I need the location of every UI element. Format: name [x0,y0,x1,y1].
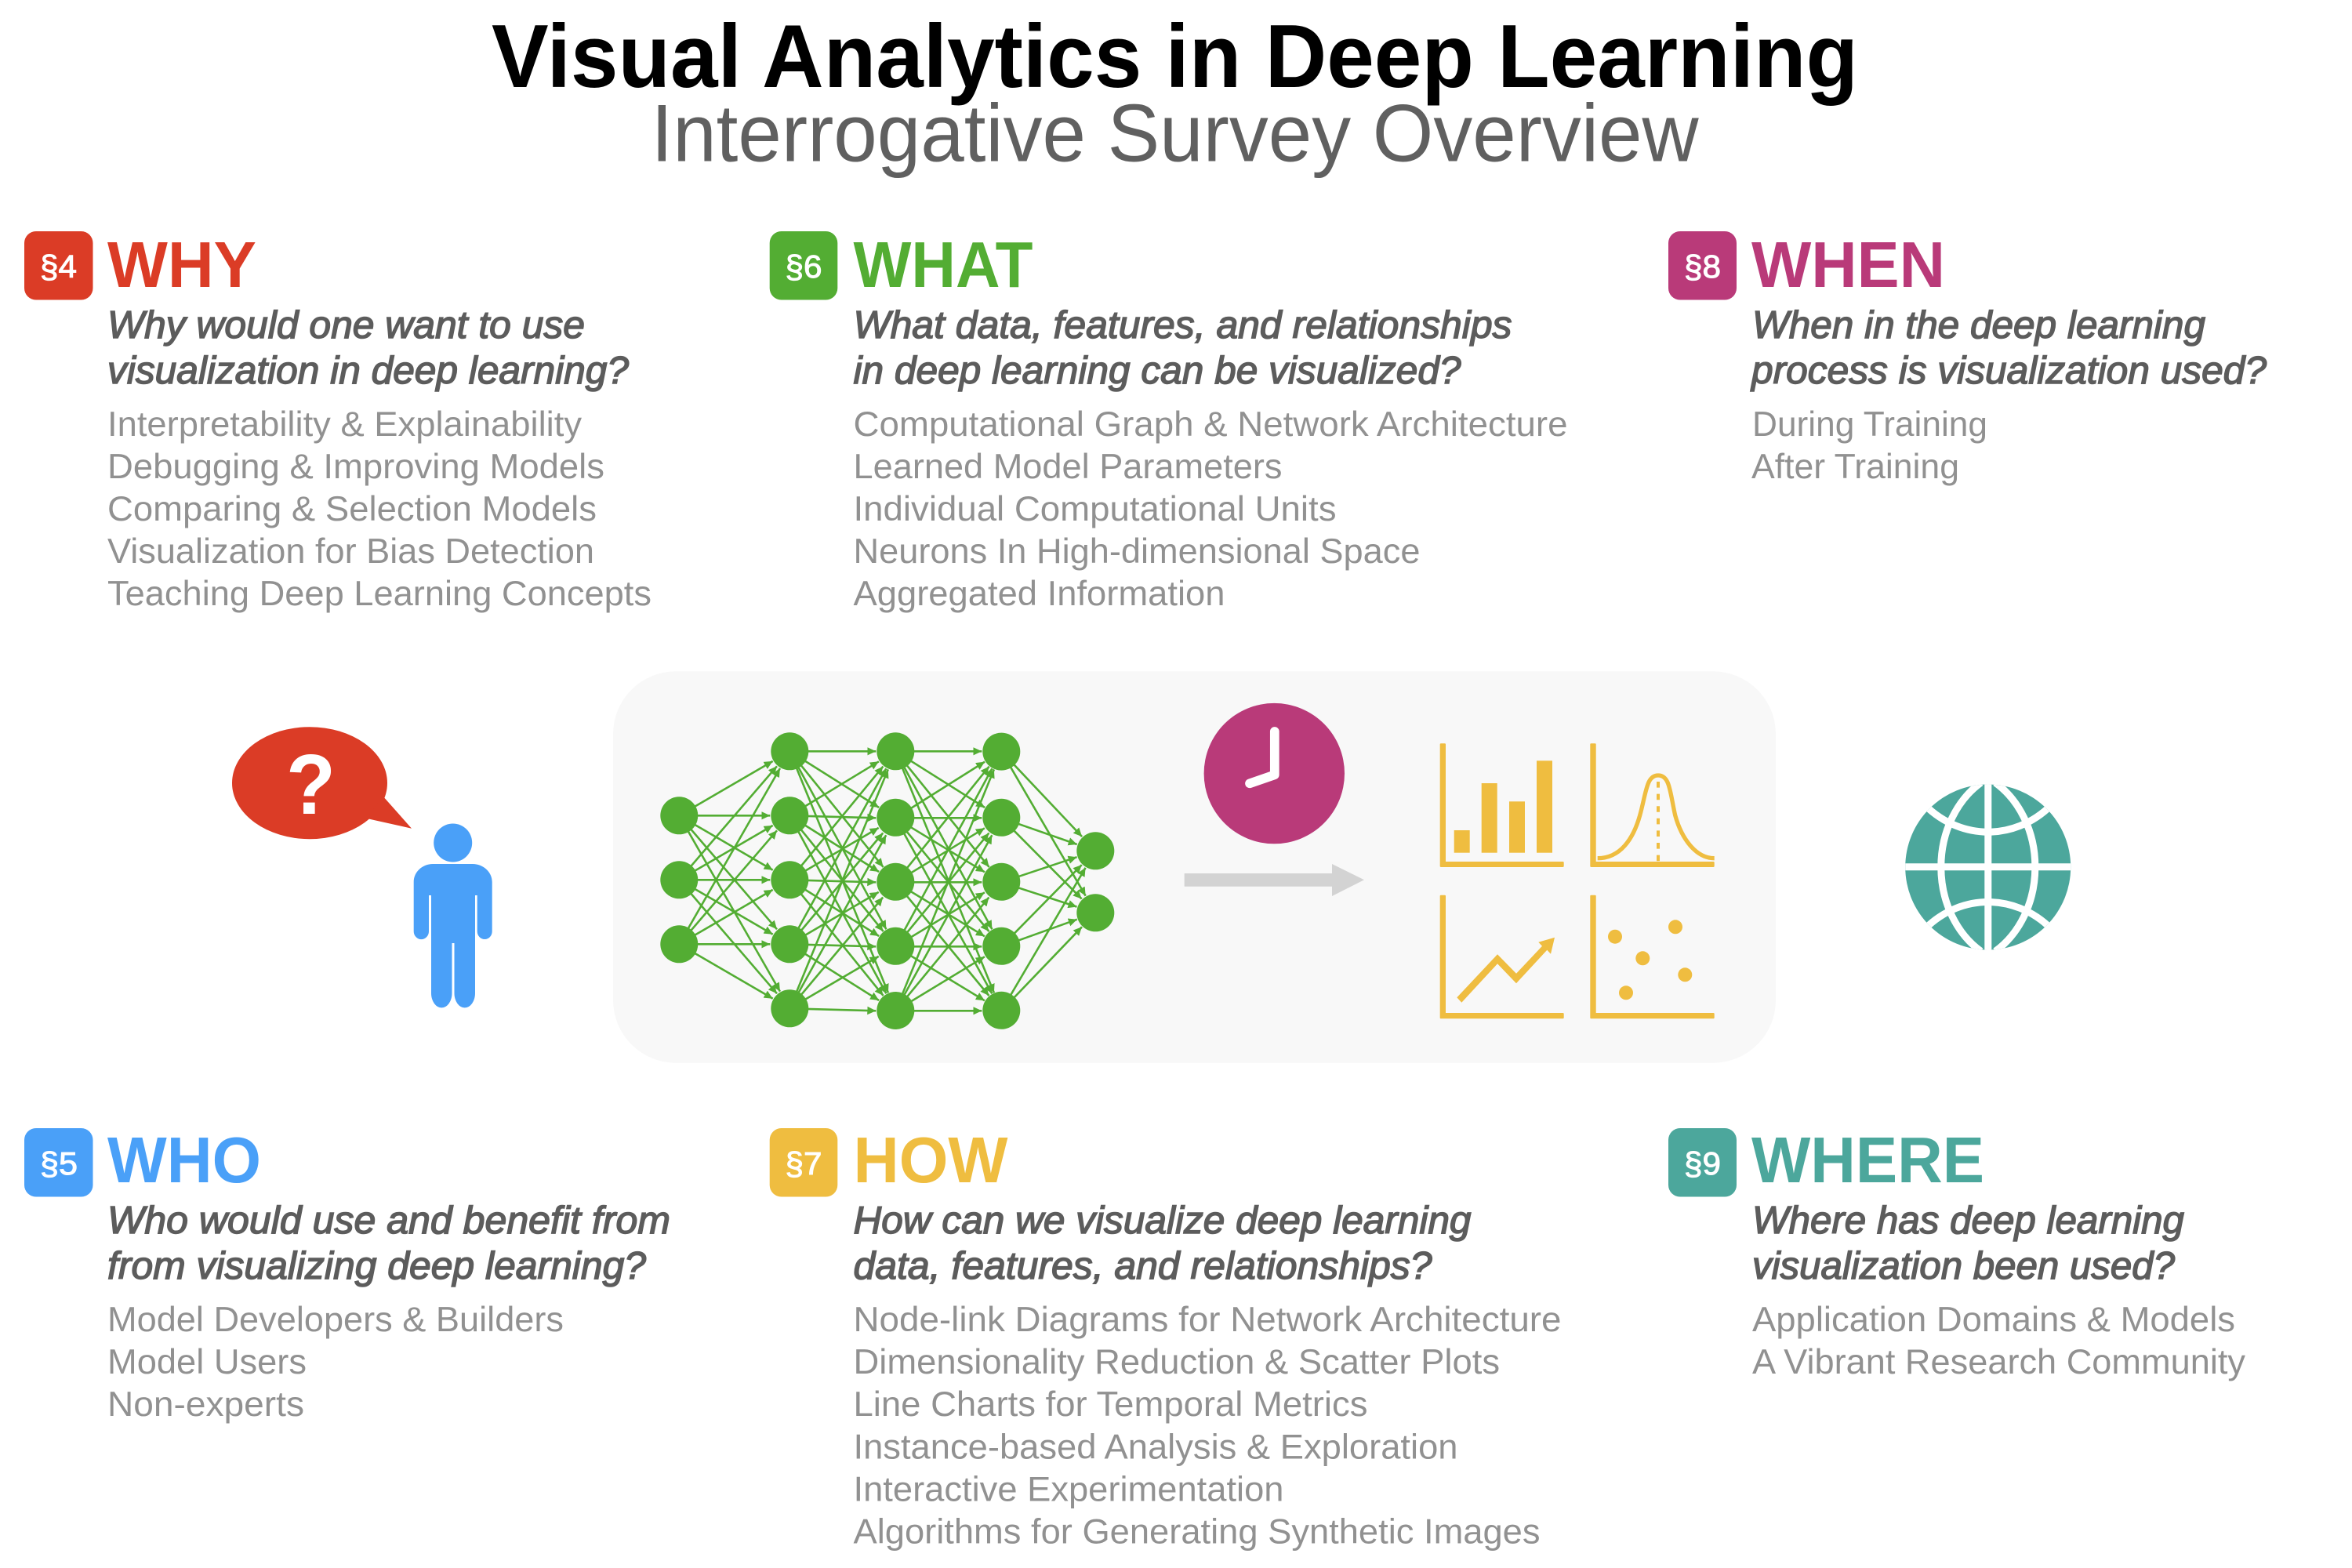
question: why: Why would one want to use [107,304,585,347]
list: what topics: Computational Graph & Network Architecture [853,405,1568,444]
question: when [1750,304,2267,392]
question: how: data, features, and relationships? [853,1245,1432,1287]
list: what topics: Aggregated Information [853,575,1225,613]
list: why topics: Comparing & Selection Models [107,490,597,528]
list: who topics: Model Developers & Builders [107,1301,564,1339]
list: what topics [853,405,1568,613]
neural network [660,732,1114,1029]
panel background [613,671,1776,1063]
title: Visual Analytics in Deep Learning [492,7,1858,107]
badge: section 9: §9 [1684,1145,1721,1181]
badge: section 7: §7 [786,1145,822,1181]
question: when: process is visualization used? [1750,350,2267,392]
list: who topics: Model Users [107,1343,307,1381]
list: how topics: Dimensionality Reduction & Scatter Plots [853,1343,1500,1381]
badge: section 5 [24,1128,93,1196]
heading: why: WHY [107,228,256,301]
question: where: visualization been used? [1752,1245,2176,1287]
question: how: How can we visualize deep learning [853,1200,1471,1242]
badge: section 8: §8 [1684,249,1721,285]
panel: who [24,1123,670,1424]
list: why topics: Visualization for Bias Detection [107,532,594,571]
question: what: What data, features, and relationships [853,304,1512,347]
list: when topics: During Training [1752,405,1987,444]
list: when topics: After Training [1751,448,1959,486]
list: where topics: A Vibrant Research Community [1752,1343,2246,1381]
list: where topics: Application Domains & Models [1752,1301,2235,1339]
list: what topics: Learned Model Parameters [853,448,1283,486]
list: what topics: Neurons In High-dimensional Space [853,532,1421,571]
question: where [1752,1200,2184,1287]
badge: section 6 [770,231,837,299]
list: when topics [1751,405,1987,486]
question: how [853,1200,1471,1287]
icon: globe [1901,780,2075,953]
network edges [679,751,1086,1011]
question: where: Where has deep learning [1752,1200,2184,1242]
badge: section 9 [1668,1128,1737,1196]
chart icon: bar chart [1440,743,1564,867]
heading: where: WHERE [1751,1123,1984,1196]
panel: model and charts [613,671,1776,1063]
badge: section 4 [24,231,93,299]
question: when: When in the deep learning [1752,304,2205,347]
list: how topics: Line Charts for Temporal Metrics [853,1385,1367,1424]
arrow [1185,864,1364,896]
list: how topics: Node-link Diagrams for Network Architecture [853,1301,1562,1339]
badge: section 7 [770,1128,837,1196]
list: how topics: Interactive Experimentation [853,1471,1284,1508]
list: why topics: Interpretability & Explainability [107,405,583,444]
badge: section 4: §4 [40,249,77,285]
subtitle: Interrogative Survey Overview [651,88,1699,179]
question: why: visualization in deep learning? [107,350,630,392]
list: who topics: Non-experts [107,1385,304,1424]
heading: how: HOW [853,1123,1008,1196]
panel: how [770,1123,1562,1551]
chart icon: scatter plot [1590,895,1715,1018]
panel: when [1668,228,2267,486]
panel: why [24,228,652,613]
list: why topics: Teaching Deep Learning Concepts [107,575,652,613]
list: why topics: Debugging & Improving Models [107,448,604,486]
heading: who: WHO [107,1123,261,1196]
badge: section 6: §6 [786,249,822,285]
question: why [107,304,630,392]
question: who: Who would use and benefit from [107,1200,670,1242]
question mark: ? [286,737,336,833]
speech bubble [232,727,412,839]
icon: clock [1204,703,1345,844]
panel: where [1668,1123,2246,1381]
list: how topics: Algorithms for Generating Synthetic Images [853,1513,1540,1551]
icon: person with question speech bubble [232,727,492,1007]
network nodes [660,732,1114,1029]
question: who: from visualizing deep learning? [107,1245,647,1287]
question: what: in deep learning can be visualized? [853,350,1461,392]
list: what topics: Individual Computational Units [853,490,1336,528]
list: who topics [107,1301,564,1424]
list: where topics [1752,1301,2246,1381]
panel: what [770,228,1568,613]
question: what [853,304,1512,392]
badge: section 8 [1668,231,1737,299]
list: how topics [853,1301,1562,1551]
person [414,823,492,1007]
heading: what: WHAT [853,228,1033,301]
chart icon: line chart [1440,895,1564,1018]
question: who [107,1200,670,1287]
list: why topics [107,405,652,613]
chart icon: distribution curve [1590,743,1715,867]
list: how topics: Instance-based Analysis & Exploration [853,1428,1458,1466]
badge: section 5: §5 [40,1145,78,1181]
heading: when: WHEN [1751,228,1945,301]
